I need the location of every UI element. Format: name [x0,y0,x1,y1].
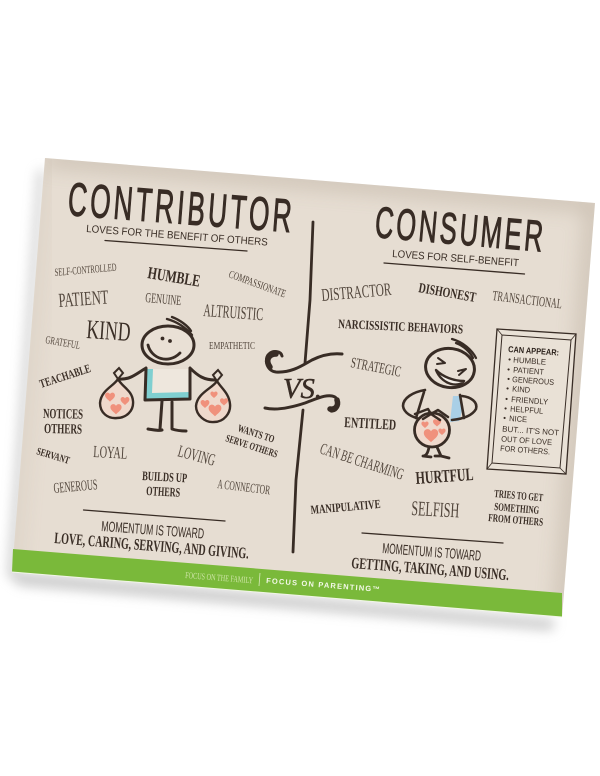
card [12,158,595,617]
word: servant: SERVANT [35,446,71,467]
word: builds up others: BUILDS UP [142,468,188,485]
callout: can appear frame: FRIENDLY [511,395,549,407]
vs. label: VS. [283,374,322,405]
word: tries to get something from others [488,488,544,529]
word: notices others: NOTICES [43,407,83,423]
icon: left heart bag [100,368,133,418]
word: patient: PATIENT [58,287,109,312]
word: notices others [43,407,83,438]
callout: can appear frame: HELPFUL [510,405,544,416]
heading: Contributor: CONTRIBUTOR [66,174,293,243]
green footer band [12,549,562,617]
callout: can appear frame: • [504,404,507,413]
momentum: contributor: MOMENTUM IS TOWARD [101,519,205,543]
panel: consumer [310,197,576,584]
callout: can appear frame: • [506,384,509,393]
word: narcissistic behaviors: NARCISSISTIC BEHAVIORS [338,316,463,336]
word: tries to get something from others: SOMETHING [494,501,540,517]
word: tries to get something from others: TRIES TO GET [494,488,544,504]
word: loving: LOVING [176,442,218,470]
illustration: consumer figure hugging heart bag [403,339,477,458]
callout: can appear frame: BUT... IT'S NOT [502,425,559,437]
icon: consumer heart bag [414,409,450,447]
word: builds up others [142,468,188,500]
callout: can appear frame: GENEROUS [512,375,554,387]
word: distractor: DISTRACTOR [321,279,392,305]
callout: can appear frame: KIND [512,385,531,395]
illustration: contributor figure holding heart bags [100,317,230,431]
callout: can appear frame: HUMBLE [513,356,546,367]
callout: can appear frame: • [507,365,510,374]
panel: contributor [35,174,293,563]
heading: Consumer: CONSUMER [373,197,545,261]
callout: can appear frame: • [507,375,510,384]
callout: can appear frame: PATIENT [513,366,545,377]
momentum: consumer: GETTING, TAKING, AND USING. [351,555,510,584]
divider: vertical line with flourishes [265,222,342,552]
word: selfish: SELFISH [411,496,460,523]
callout: can appear frame [487,329,576,474]
subheading: loves for the benefit of others: LOVES FOR THE BENEFIT OF OTHERS [86,223,268,249]
word: wants to serve others [224,423,279,461]
word: loyal: LOYAL [93,442,128,463]
word: wants to serve others: WANTS TO [236,423,276,446]
word: grateful: GRATEFUL [44,334,81,352]
word: wants to serve others: SERVE OTHERS [224,433,279,461]
momentum: contributor [54,519,249,563]
momentum: consumer [351,541,510,584]
word: generous: GENEROUS [53,477,98,497]
word: dishonest: DISHONEST [417,281,477,306]
word: kind: KIND [86,314,132,347]
momentum: consumer: MOMENTUM IS TOWARD [382,541,482,565]
callout: can appear frame: • [508,355,511,364]
word: entitled: ENTITLED [344,415,397,434]
momentum: contributor: LOVE, CARING, SERVING, AND GIVING. [54,530,249,563]
footer logo: Focus on the Family: FOCUS ON THE FAMILY [185,570,254,585]
subheading: loves for self-benefit: LOVES FOR SELF-BENEFIT [392,248,520,269]
word: teachable: TEACHABLE [38,361,92,391]
word: humble: HUMBLE [146,263,202,291]
word: empathetic: EMPATHETIC [209,340,255,352]
word: builds up others: OTHERS [146,483,181,500]
word: genuine: GENUINE [145,291,182,309]
footer label: Focus on Parenting: FOCUS ON PARENTING™ [266,576,380,594]
word: compassionate: COMPASSIONATE [227,269,288,300]
word: self-controlled: SELF-CONTROLLED [54,262,117,279]
word: notices others: OTHERS [44,422,82,438]
word: hurtful: HURTFUL [415,464,474,488]
callout: can appear frame: CAN APPEAR: [508,344,560,358]
word: a connector: A CONNECTOR [217,476,271,497]
word: strategic: STRATEGIC [349,355,402,381]
word: can be charming: CAN BE CHARMING [318,441,406,484]
icon: right heart bag [196,370,230,422]
callout: can appear frame: FOR OTHERS. [500,444,550,456]
callout: can appear frame: • [503,414,506,423]
word: tries to get something from others: FROM OTHERS [488,512,544,529]
card shadow [8,170,555,630]
infographic: contributor vs consumer card [2,158,595,636]
word: altruistic: ALTRUISTIC [203,300,264,324]
callout: can appear frame: NICE [509,414,527,424]
callout: can appear frame: • [505,395,508,404]
callout: can appear frame: OUT OF LOVE [501,435,552,447]
word: manipulative: MANIPULATIVE [310,497,381,517]
